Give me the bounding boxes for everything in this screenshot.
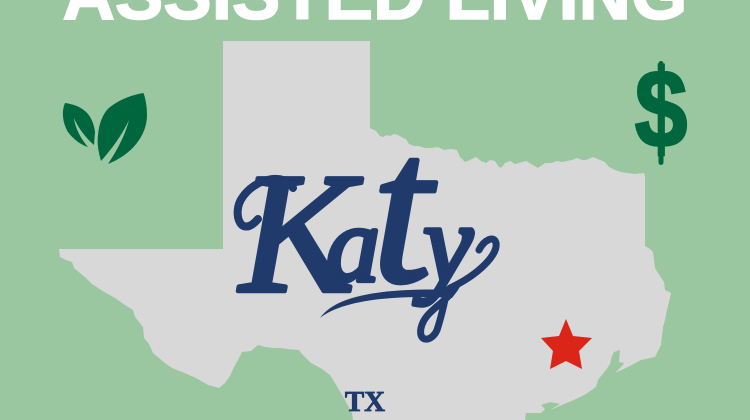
icon: leaves — [63, 93, 147, 164]
city name: Katy: y — [413, 182, 473, 306]
state label: TX — [345, 386, 385, 418]
flourish: swoosh and y loop — [320, 290, 458, 318]
city name: Katy: K — [237, 139, 363, 329]
star marker — [541, 319, 592, 369]
city name: Katy: t — [372, 89, 437, 328]
icon: dollar sign: $ — [635, 47, 687, 171]
city name: Katy: a — [326, 186, 380, 305]
flourish: y arm — [450, 239, 496, 288]
map of Texas — [59, 41, 671, 420]
city name: Katy — [237, 89, 496, 339]
flourish: K swash — [238, 179, 293, 227]
